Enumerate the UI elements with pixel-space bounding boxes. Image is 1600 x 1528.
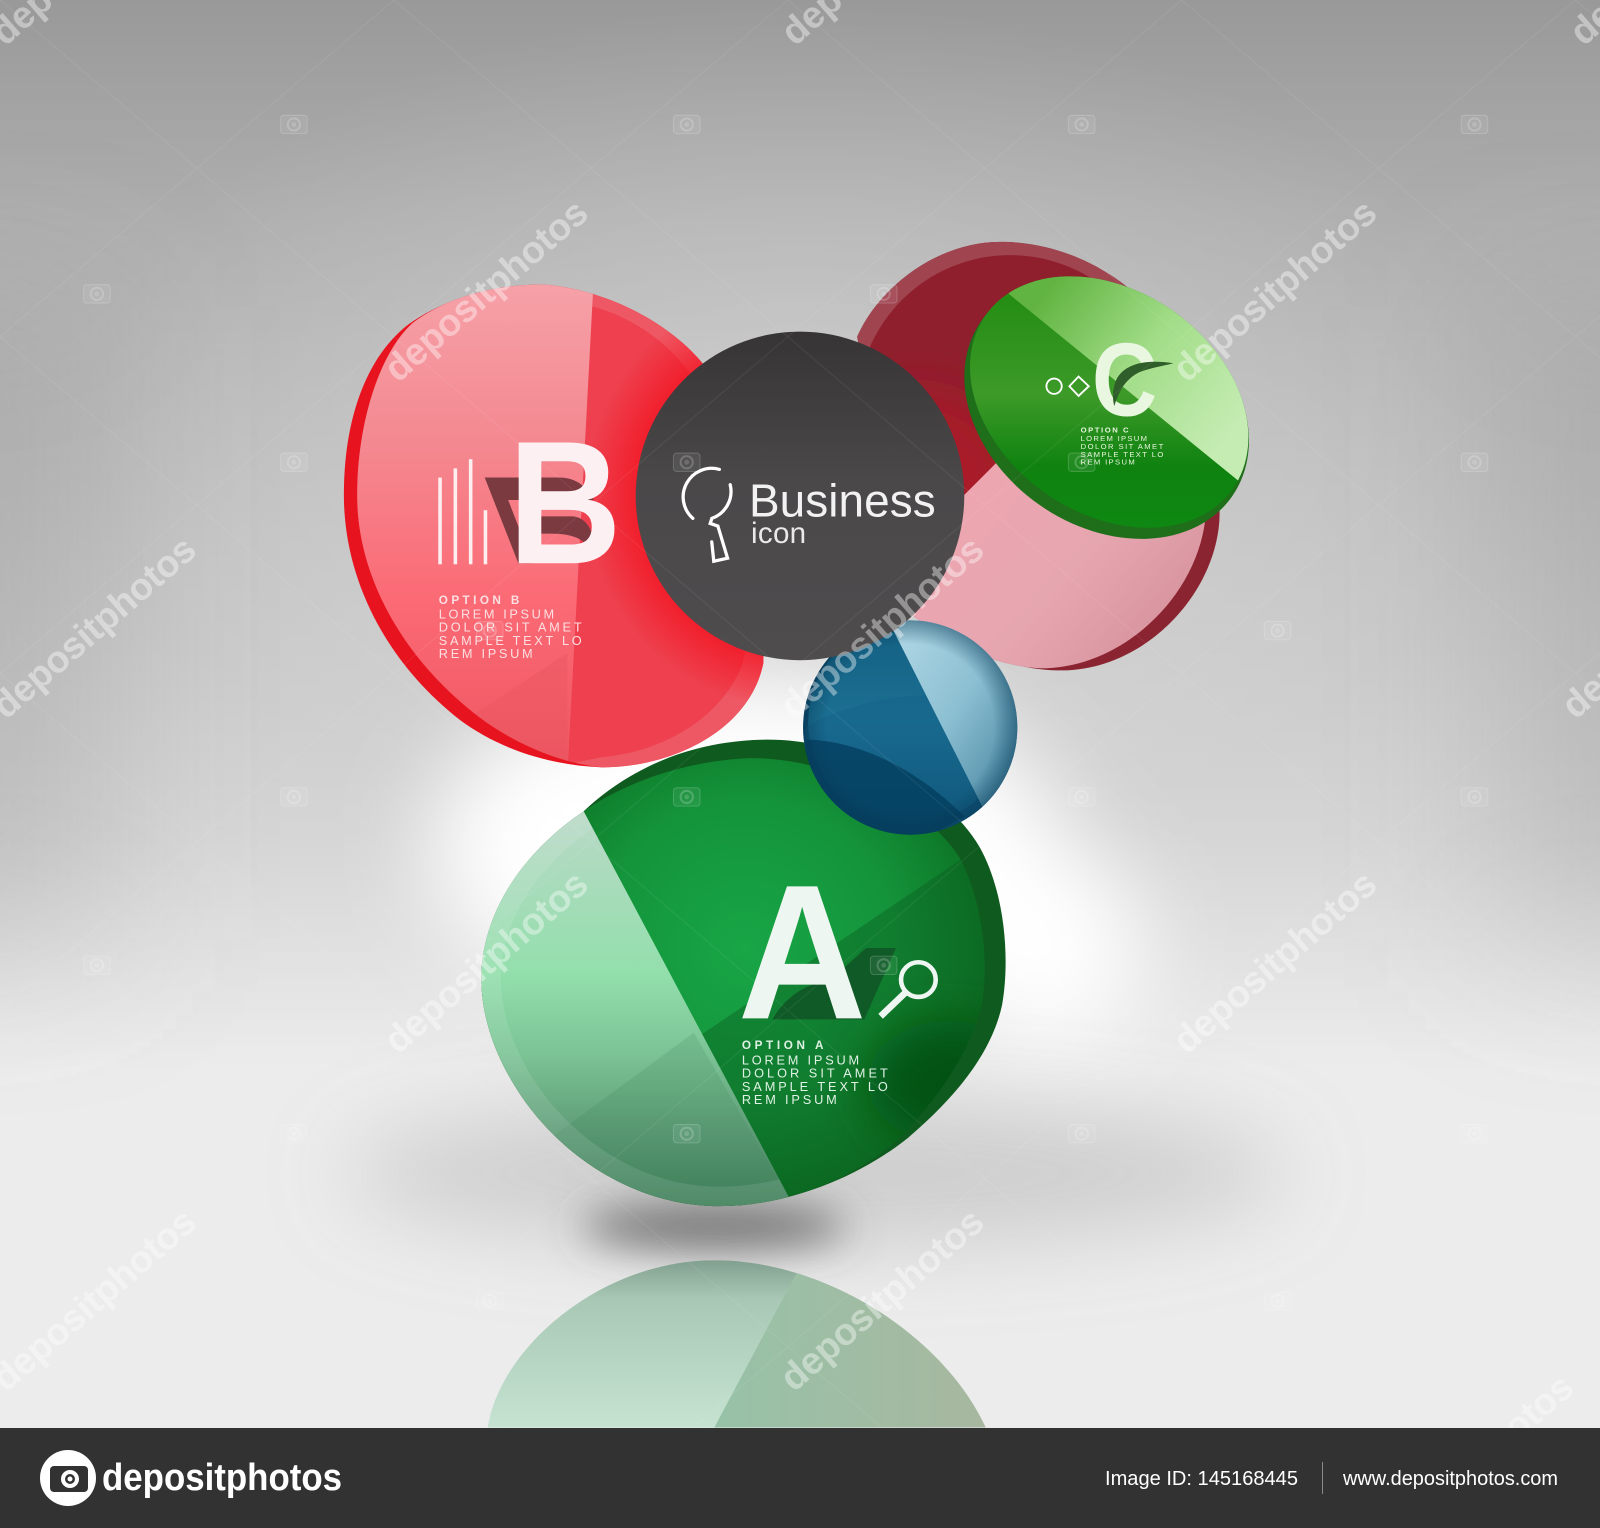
panel: dark centre circle [636, 332, 964, 660]
reflection of circle A [480, 1255, 1000, 1429]
panel: blue circle [803, 620, 1018, 835]
footer bar [0, 1428, 1600, 1528]
panel: green circle A [469, 735, 1031, 1214]
option C text: OPTION C [1081, 426, 1129, 435]
letter C shadow [1113, 362, 1173, 406]
option B text: OPTION B [439, 594, 519, 607]
option A text: SAMPLE TEXT LO [742, 1079, 888, 1094]
back circle: dark red and pink [857, 242, 1220, 670]
option B text: REM IPSUM [439, 646, 533, 661]
option A text: REM IPSUM [742, 1092, 837, 1107]
letter C: C [1092, 321, 1157, 438]
website: www.depositphotos.com [1342, 1467, 1558, 1490]
option B text [439, 594, 582, 661]
option C text: DOLOR SIT AMET [1081, 442, 1164, 451]
image id: Image ID: 145168445 [1105, 1467, 1298, 1490]
panel: green disc C [964, 276, 1249, 539]
darker side falloff [0, 306, 1600, 939]
icon: key outline [683, 468, 731, 561]
letter A shadow [772, 948, 896, 1019]
watermark words: depositphotos [376, 191, 596, 390]
divider [1322, 1462, 1323, 1494]
heading: Business: Business [749, 474, 936, 526]
watermark words: depositphotos [772, 1200, 992, 1399]
wide floor shadow [347, 1102, 1286, 1245]
letter A: A [738, 845, 867, 1060]
option C text: LOREM IPSUM [1081, 434, 1147, 443]
option A text: OPTION A [742, 1039, 824, 1052]
option C text [1081, 426, 1164, 466]
option B text: DOLOR SIT AMET [439, 620, 582, 635]
watermark words: depositphotos [1164, 191, 1385, 390]
logo badge [40, 1450, 96, 1506]
watermark words: depositphotos [1164, 862, 1385, 1061]
option A text: LOREM IPSUM [742, 1052, 859, 1067]
subheading: icon: icon [751, 517, 806, 550]
option C text: SAMPLE TEXT LO [1081, 450, 1163, 459]
logo wordmark: depositphotos [102, 1457, 342, 1499]
option C text: REM IPSUM [1081, 457, 1135, 466]
watermark camera icons [84, 115, 1488, 1310]
panel: red circle B [344, 284, 764, 768]
watermark words: depositphotos [376, 862, 596, 1061]
watermark words: depositphotos [772, 527, 992, 726]
upper centre soft light [86, 0, 1514, 857]
icon: bar lines [438, 459, 487, 564]
option A text [742, 1039, 888, 1107]
option A text: DOLOR SIT AMET [742, 1066, 888, 1081]
icon: circle and diamond [1046, 377, 1089, 396]
icon: magnifier [881, 962, 936, 1016]
letter B: B [508, 405, 622, 601]
contact shadow under circle A [582, 1204, 847, 1249]
option B text: LOREM IPSUM [439, 606, 554, 621]
option B text: SAMPLE TEXT LO [439, 633, 582, 648]
white glow behind the shapes [429, 673, 1143, 1051]
letter B shadow [485, 478, 595, 563]
